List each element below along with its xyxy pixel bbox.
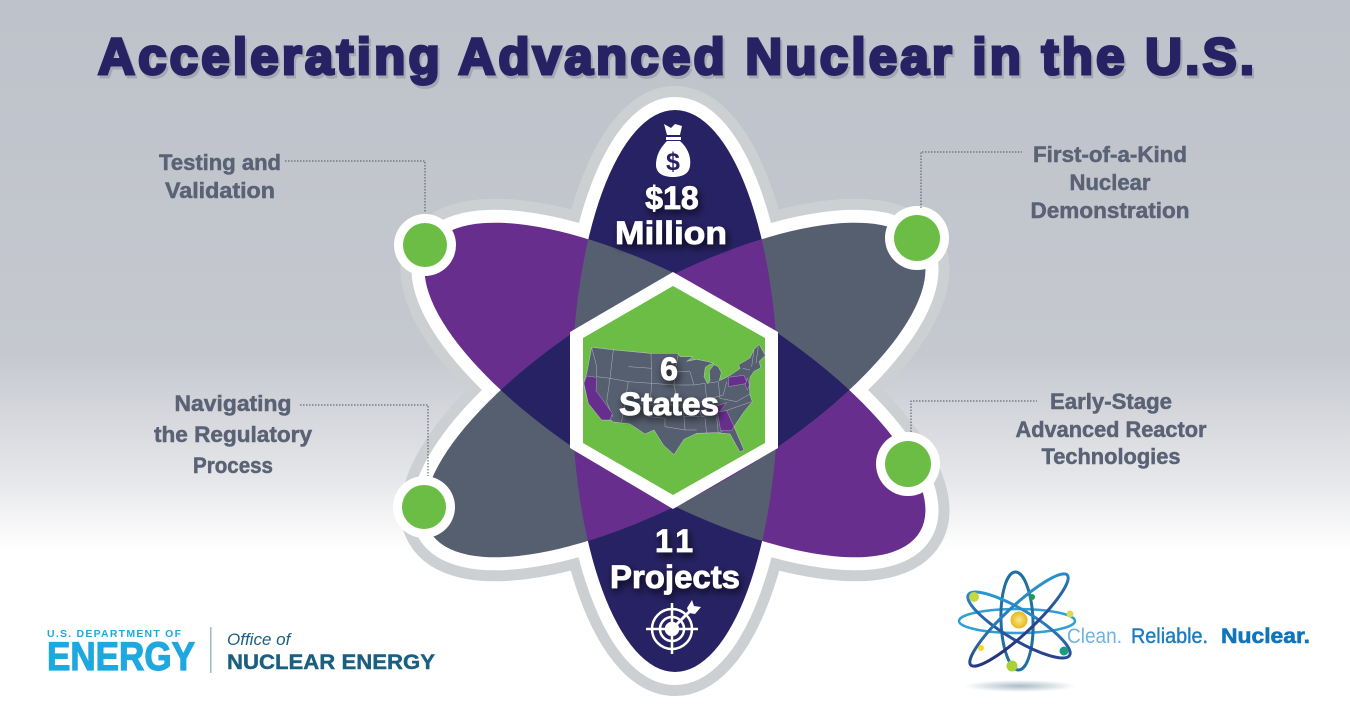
stat: 11 Projects <box>610 523 740 595</box>
atom white outline <box>378 110 972 672</box>
overlap: purple and vertical <box>574 239 776 541</box>
overlap: purple and slate <box>501 334 849 446</box>
label: first-of-a-kind: Demonstration <box>1030 198 1190 223</box>
icon: money bag <box>656 124 690 177</box>
label: testing and validation: Testing and <box>159 150 281 175</box>
atom diagram <box>378 110 972 672</box>
icon: target <box>646 600 701 654</box>
label: testing and validation: Validation <box>165 178 275 203</box>
stat: 11 Projects: Projects <box>610 559 740 595</box>
label: navigating the regulatory process: the Regulatory <box>154 422 313 447</box>
logo: department of energy: U.S. DEPARTMENT OF <box>47 628 182 640</box>
label: navigating the regulatory process: Process <box>193 453 273 478</box>
stat: 11 Projects: 11 <box>655 523 693 559</box>
logo atom <box>959 565 1077 675</box>
stat: $18 Million: $18 <box>645 180 699 216</box>
logo: department of energy: NUCLEAR ENERGY <box>227 651 435 674</box>
logo tagline <box>1067 625 1310 648</box>
label: navigating the regulatory process <box>154 391 313 478</box>
stat: 6 States: 6 <box>660 351 678 387</box>
logo tagline: Reliable. <box>1131 625 1208 648</box>
label: early-stage: Advanced Reactor <box>1016 417 1207 442</box>
stat: $18 Million <box>615 180 727 251</box>
logo: department of energy <box>47 627 435 679</box>
title: Accelerating Advanced Nuclear in the U.S. <box>98 28 1254 85</box>
label: first-of-a-kind: Nuclear <box>1070 170 1151 195</box>
map land <box>583 345 765 455</box>
leader lines <box>285 152 1037 476</box>
label: first-of-a-kind: First-of-a-Kind <box>1033 142 1187 167</box>
hexagon green <box>583 286 765 495</box>
icon: money bag: $ <box>666 148 680 176</box>
label: testing and validation <box>159 150 281 203</box>
logo: department of energy: ENERGY <box>47 635 195 679</box>
orbit: vertical navy <box>572 110 778 672</box>
stat: 6 States: States <box>619 386 719 422</box>
logo shadow <box>964 680 1076 692</box>
map highlighted states <box>584 375 749 431</box>
label: navigating the regulatory process: Navigating <box>174 391 292 416</box>
hexagon white frame <box>570 272 778 509</box>
map state borders <box>592 347 758 433</box>
label: early-stage: Technologies <box>1042 444 1180 469</box>
overlap: slate and vertical <box>574 239 776 541</box>
map of the United States <box>583 345 765 455</box>
logo tagline: Nuclear. <box>1221 625 1310 648</box>
title: Accelerating Advanced Nuclear in the U.S. <box>100 31 1256 88</box>
label: early-stage <box>1016 389 1207 469</box>
label: first-of-a-kind <box>1030 142 1190 223</box>
electron bottom right <box>876 432 940 496</box>
atom outer gray halo <box>378 110 972 672</box>
label: early-stage: Early-Stage <box>1050 389 1172 414</box>
electrons <box>393 206 949 538</box>
logo tagline: Clean. <box>1067 625 1122 648</box>
orbit: slate <box>378 159 972 621</box>
electron top right <box>885 206 949 270</box>
logo: clean reliable nuclear <box>959 565 1310 692</box>
electron bottom left <box>393 476 455 538</box>
orbit: purple <box>378 159 972 621</box>
stat: $18 Million: Million <box>615 215 727 251</box>
stat: 6 States <box>619 351 719 422</box>
electron top left <box>394 214 456 276</box>
logo: department of energy: Office of <box>227 630 293 649</box>
